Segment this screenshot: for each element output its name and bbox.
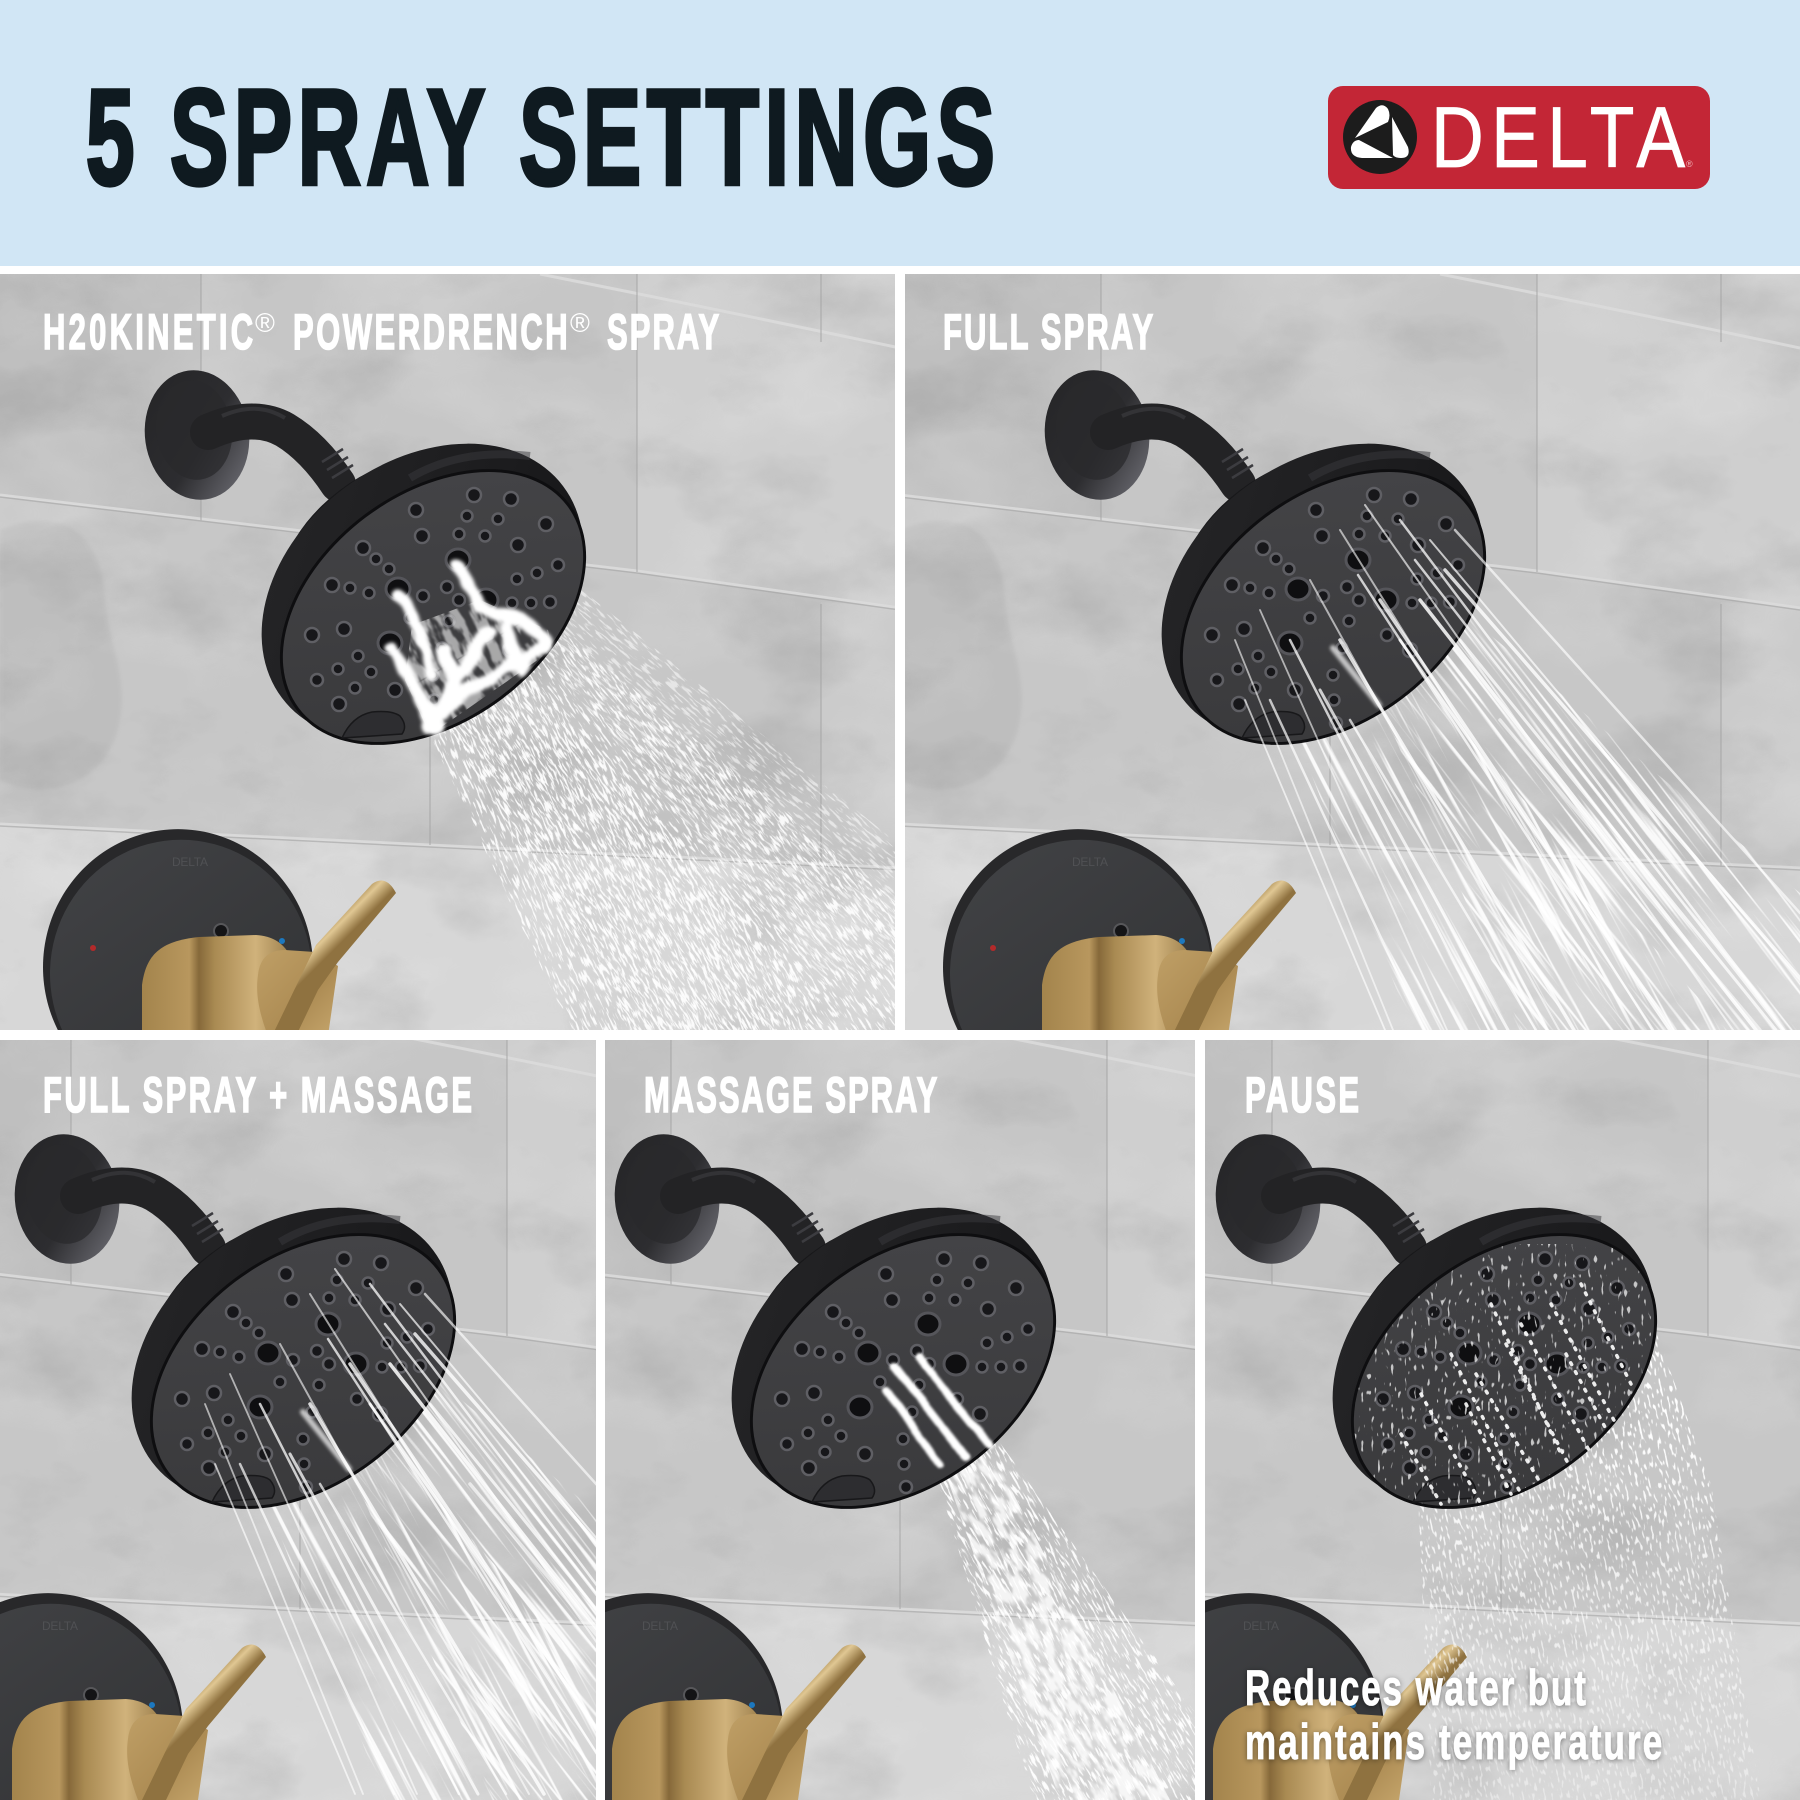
- wall: [0, 1034, 770, 1800]
- panel: massage spray: [605, 1040, 1195, 1800]
- header band: [0, 0, 1800, 266]
- icon: shower head: [1207, 1127, 1712, 1566]
- spray streaks: [1235, 505, 1800, 1030]
- wall: [900, 270, 1800, 1036]
- icon: shower head: [1036, 363, 1541, 802]
- brand mark on valve plate: DELTA: [1072, 855, 1108, 869]
- icon: shower head: [6, 1127, 511, 1566]
- wall: [0, 270, 900, 1036]
- heading: POWERDRENCH: [293, 303, 568, 360]
- valve and gold handle: [943, 829, 1296, 1036]
- spray water: [253, 1367, 770, 1800]
- title: 5 SPRAY SETTINGS: [86, 63, 995, 214]
- heading: PAUSE: [1245, 1066, 1359, 1123]
- panel: H2Okinetic PowerDrench spray: [0, 274, 895, 1030]
- heading: H20KINETIC: [43, 303, 253, 360]
- heading: [43, 303, 719, 360]
- heading: ®: [570, 308, 590, 338]
- wall: [470, 1034, 1370, 1800]
- brand mark on valve plate: DELTA: [1243, 1619, 1279, 1633]
- heading: SPRAY: [607, 303, 719, 360]
- logo: Delta: DELTA: [1431, 89, 1686, 185]
- valve and gold handle: [1114, 1593, 1467, 1800]
- brand mark on valve plate: DELTA: [42, 1619, 78, 1633]
- panel: full spray: [905, 274, 1800, 1030]
- brand mark on valve plate: DELTA: [642, 1619, 678, 1633]
- heading: ®: [255, 308, 275, 338]
- brand mark on valve plate: DELTA: [172, 855, 208, 869]
- valve and gold handle: [43, 829, 396, 1036]
- heading: FULL SPRAY: [943, 303, 1153, 360]
- callout text: [1245, 1661, 1662, 1771]
- panel: full spray + massage: [0, 1040, 596, 1800]
- droplets on face: [1351, 1244, 1651, 1514]
- callout text: Reduces water but: [1245, 1661, 1586, 1717]
- logo: Delta: ®: [1686, 159, 1693, 169]
- water jets on face: [392, 566, 552, 735]
- spray water: [1283, 603, 1800, 1036]
- valve and gold handle: [513, 1593, 866, 1800]
- logo: Delta: [1328, 86, 1710, 189]
- heading: MASSAGE SPRAY: [644, 1066, 937, 1123]
- heading: FULL SPRAY + MASSAGE: [43, 1066, 472, 1123]
- spray streaks: [205, 1269, 770, 1794]
- valve and gold handle: [0, 1593, 266, 1800]
- icon: shower head: [136, 363, 641, 802]
- panel: pause: [1205, 1040, 1800, 1800]
- water jets on face: [887, 1358, 989, 1465]
- water droplets: [1416, 1304, 1761, 1800]
- spray water: [415, 570, 900, 1036]
- icon: shower head: [606, 1127, 1111, 1566]
- spray water: [935, 1436, 1196, 1800]
- callout text: maintains temperature: [1245, 1715, 1662, 1771]
- wall: [1071, 1034, 1800, 1800]
